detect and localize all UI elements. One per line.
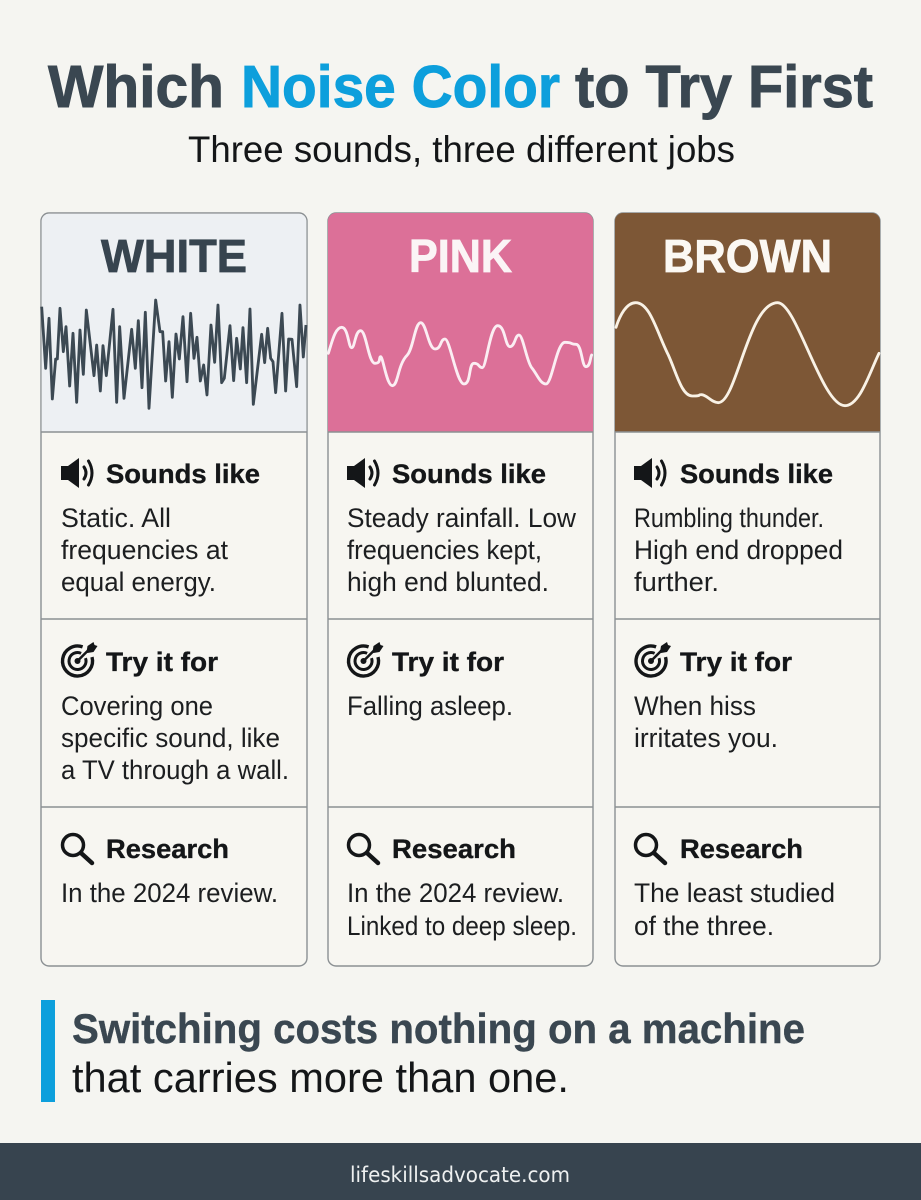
description: a TV through a wall.: [61, 755, 289, 785]
pink research row: [347, 834, 577, 941]
heading: Sounds like: [106, 459, 260, 489]
description: The least studied: [634, 878, 835, 908]
description: frequencies kept,: [347, 535, 542, 565]
description: further.: [634, 567, 719, 597]
callout accent bar: [41, 1000, 55, 1102]
description: [634, 878, 835, 941]
pink heading: PINK: [409, 230, 512, 282]
white header: [42, 214, 306, 432]
icon: magnifier: [62, 834, 92, 863]
description: When hiss: [634, 691, 756, 721]
description: [347, 878, 577, 941]
icon: target: [636, 642, 671, 676]
white waveform: [42, 300, 306, 408]
heading: Try it for: [392, 647, 505, 677]
description: [61, 503, 228, 597]
icon: speaker: [347, 458, 378, 488]
brown sounds like row: [634, 458, 843, 597]
description: [61, 691, 289, 785]
icon: speaker: [61, 458, 92, 488]
icon: target: [349, 642, 384, 676]
brown header: [615, 213, 880, 432]
heading: Research: [106, 834, 229, 864]
description: equal energy.: [61, 567, 216, 597]
brown waveform: [616, 303, 879, 406]
description: In the 2024 review.: [61, 878, 278, 908]
description: Falling asleep.: [347, 691, 513, 721]
subtitle: Three sounds, three different jobs: [188, 129, 735, 170]
description: Rumbling thunder.: [634, 503, 824, 533]
pink try it for row: [347, 642, 513, 721]
callout bold line: Switching costs nothing on a machine: [72, 1005, 805, 1052]
description: specific sound, like: [61, 723, 280, 753]
description: [634, 691, 778, 753]
description: frequencies at: [61, 535, 228, 565]
brown heading: BROWN: [663, 230, 832, 282]
pink header: [328, 213, 593, 432]
brown research row: [634, 834, 835, 941]
description: In the 2024 review.: [347, 878, 564, 908]
description: irritates you.: [634, 723, 778, 753]
icon: speaker: [634, 458, 665, 488]
title: Noise Color: [241, 54, 560, 120]
title: Which: [48, 54, 224, 120]
panel: white noise: [41, 213, 307, 966]
white try it for row: [61, 642, 289, 785]
description: Static. All: [61, 503, 171, 533]
white heading: WHITE: [101, 230, 247, 282]
title: to Try First: [575, 54, 873, 120]
description: Linked to deep sleep.: [347, 911, 577, 941]
description: [634, 503, 843, 597]
heading: Research: [680, 834, 803, 864]
heading: Sounds like: [680, 459, 833, 489]
heading: Research: [392, 834, 516, 864]
callout regular line: that carries more than one.: [72, 1054, 569, 1101]
title: [48, 54, 873, 120]
heading: Try it for: [106, 647, 219, 677]
description: Steady rainfall. Low: [347, 503, 576, 533]
brown try it for row: [634, 642, 793, 753]
pink waveform: [328, 323, 592, 386]
heading: Try it for: [680, 647, 793, 677]
description: high end blunted.: [347, 567, 549, 597]
description: [347, 503, 576, 597]
icon: magnifier: [348, 834, 378, 863]
callout: [41, 1000, 805, 1102]
description: High end dropped: [634, 535, 843, 565]
footer: [0, 1143, 921, 1200]
icon: target: [63, 642, 98, 676]
panel: brown noise: [615, 213, 880, 966]
panel: pink noise: [328, 213, 593, 966]
description: Covering one: [61, 691, 213, 721]
pink sounds like row: [347, 458, 576, 597]
footer url: lifeskillsadvocate.com: [350, 1163, 570, 1187]
icon: magnifier: [636, 834, 665, 863]
heading: Sounds like: [392, 459, 546, 489]
description: of the three.: [634, 911, 774, 941]
white research row: [61, 834, 278, 908]
white sounds like row: [61, 458, 260, 597]
